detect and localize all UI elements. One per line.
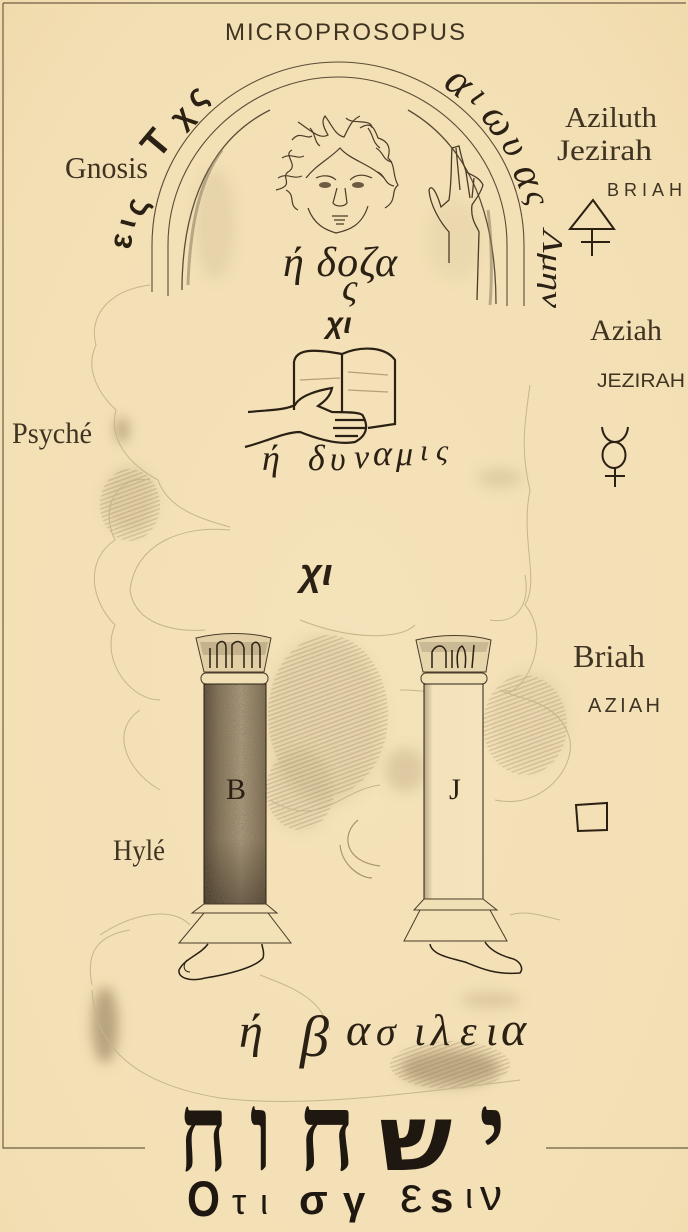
ornament: chi middle: χι bbox=[296, 552, 333, 594]
Greek: he dynamis: ή bbox=[262, 438, 280, 478]
Greek: he basileia: σ bbox=[376, 1009, 397, 1054]
Greek motto: oti sy esin: ι bbox=[465, 1175, 473, 1216]
Greek: he dynamis: μ bbox=[395, 436, 413, 473]
Greek: he dynamis: δ bbox=[308, 438, 326, 478]
label: Aziah: Aziah bbox=[590, 314, 662, 347]
label: AZIAH: AZIAH bbox=[588, 695, 660, 717]
icon: sulphur triangle bbox=[570, 200, 614, 256]
Greek: he doxa: ή δοζα bbox=[283, 240, 398, 286]
Greek inscription: eis tes: χ bbox=[164, 98, 200, 134]
Greek: he basileia: ε bbox=[460, 1009, 477, 1055]
label: JEZIRAH: JEZIRAH bbox=[597, 371, 685, 392]
face with hair bbox=[276, 116, 398, 233]
label: Psyche: Psyché bbox=[12, 417, 92, 450]
Hebrew inscription: ח bbox=[298, 1074, 356, 1194]
Greek inscription: aionas: α bbox=[436, 55, 485, 108]
Greek: he dynamis: α bbox=[373, 433, 393, 473]
Greek motto: oti sy esin: ε bbox=[400, 1167, 422, 1223]
label: Hyle: Hylé bbox=[113, 834, 165, 867]
Greek motto: oti sy esin: γ bbox=[343, 1179, 366, 1223]
icon: square bbox=[576, 803, 607, 831]
Greek: he basileia bbox=[239, 1003, 527, 1069]
Greek: he basileia: β bbox=[299, 1004, 329, 1069]
right foot bbox=[430, 942, 522, 973]
Greek: he dynamis: ς bbox=[436, 434, 449, 467]
cloud hatching bbox=[100, 469, 567, 1089]
Greek: he basileia: ή bbox=[239, 1005, 263, 1058]
ornament: sigma: ς bbox=[342, 267, 358, 309]
label: Aziluth: Aziluth bbox=[565, 102, 658, 134]
hand holding book bbox=[245, 388, 366, 447]
Hebrew inscription: ו bbox=[250, 1075, 272, 1194]
Greek: he basileia: ι bbox=[414, 1009, 426, 1055]
crescent moon bbox=[340, 820, 380, 878]
Hebrew inscription bbox=[179, 1074, 506, 1194]
label: Briah: Briah bbox=[573, 638, 645, 674]
Greek inscription: eis tes: ς bbox=[178, 77, 214, 115]
Greek motto: oti sy esin: σ bbox=[299, 1176, 328, 1223]
left foot bbox=[179, 944, 264, 980]
Hebrew inscription: ח bbox=[179, 1074, 228, 1194]
Greek inscription: aionas: ω bbox=[472, 95, 526, 146]
Greek: he dynamis: υ bbox=[330, 441, 346, 478]
Greek motto: oti sy esin bbox=[187, 1167, 502, 1227]
letter J: J bbox=[449, 773, 461, 806]
Greek inscription: eis tes: ι bbox=[110, 215, 142, 230]
open book bbox=[294, 349, 395, 428]
Greek motto: oti sy esin: s bbox=[430, 1174, 453, 1221]
Greek inscription: aionas bbox=[436, 55, 557, 209]
Greek inscription: aionas: υ bbox=[493, 128, 538, 163]
Greek inscription: eis tes: ς bbox=[116, 193, 155, 220]
label: BRIAH: BRIAH bbox=[607, 180, 682, 200]
Greek inscription: eis tes: Τ bbox=[133, 121, 180, 166]
icon: mercury bbox=[602, 427, 628, 487]
Greek motto: oti sy esin: ν bbox=[480, 1171, 502, 1220]
Greek motto: oti sy esin: O bbox=[187, 1171, 220, 1227]
Greek: he dynamis bbox=[262, 433, 449, 478]
cloud shading bbox=[92, 170, 568, 1086]
Greek: he basileia: α bbox=[501, 1003, 527, 1056]
pillar: Jachin bbox=[404, 636, 507, 941]
heading: Microprosopus: MICROPROSOPUS bbox=[225, 19, 465, 46]
Greek inscription: eis tes bbox=[102, 77, 214, 251]
Greek: he basileia: λ bbox=[429, 1006, 450, 1055]
Greek inscription: amen: Λμην bbox=[536, 226, 567, 309]
raised hand bbox=[429, 146, 483, 300]
Greek inscription: aionas: ι bbox=[463, 79, 496, 112]
ornament: chi: χι bbox=[323, 307, 352, 340]
Greek: he dynamis: ν bbox=[354, 439, 370, 476]
Greek: he dynamis: ι bbox=[420, 434, 428, 467]
clouds outline bbox=[90, 285, 570, 1102]
Greek inscription: aionas: α bbox=[503, 157, 554, 196]
pillar: Boaz bbox=[179, 634, 291, 943]
Greek inscription: aionas: ς bbox=[517, 186, 557, 209]
arch bbox=[152, 62, 524, 306]
label: Gnosis: Gnosis bbox=[65, 150, 148, 185]
letter B: B bbox=[226, 773, 246, 806]
Hebrew inscription: י bbox=[479, 1074, 506, 1194]
Greek: he basileia: α bbox=[346, 1004, 371, 1055]
Greek: he basileia: ι bbox=[486, 1009, 498, 1055]
Greek inscription: eis tes: ε bbox=[102, 231, 139, 251]
label: Jezirah: Jezirah bbox=[557, 134, 652, 167]
Greek motto: oti sy esin: τι bbox=[232, 1181, 268, 1222]
Hebrew inscription: ש bbox=[379, 1085, 452, 1192]
